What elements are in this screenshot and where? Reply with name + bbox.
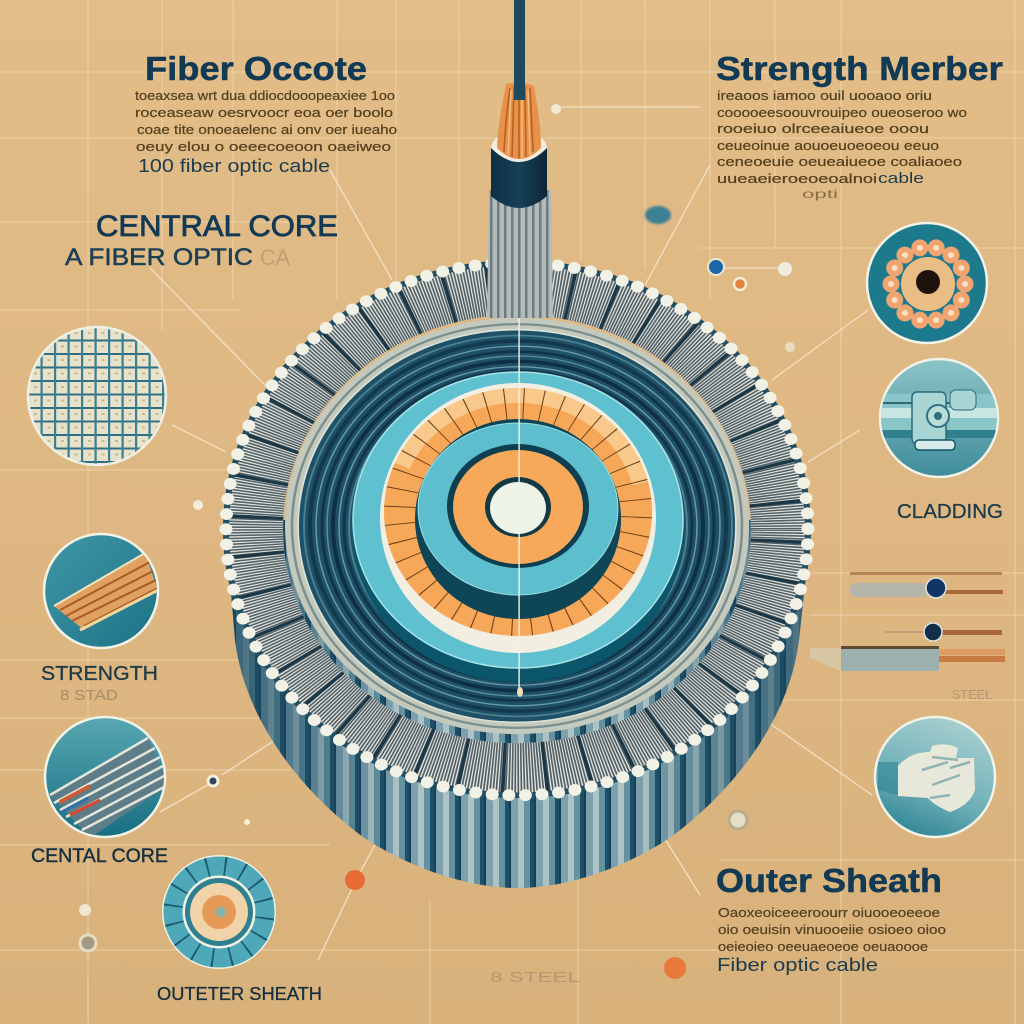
strength strands hatch ring: [226, 263, 808, 795]
body text: oio oeuisin vinuooeiie osioeo oioo: [718, 923, 946, 937]
heading: central core: CENTRAL CORE: [96, 210, 338, 243]
tagline: Fiber optic cable: [717, 955, 878, 975]
body text: toeaxsea wrt dua ddiocdooopeaxiee 1oo: [135, 89, 395, 103]
body text: coae tite onoeaelenc ai onv oer iueaho: [137, 123, 397, 137]
copper conductors: [939, 649, 1005, 655]
subheading: A FIBER OPTIC: [65, 244, 253, 271]
body text: roceaseaw oesrvoocr eoa oer boolo: [135, 106, 393, 120]
wire layer: [304, 336, 732, 716]
copper fibers: [497, 82, 541, 159]
body text: ireaoos iamoo ouil uooaoo oriu: [717, 89, 932, 103]
body text: cooooeesoouvrouipeo oueoseroo wo: [717, 106, 967, 120]
axis line: [518, 315, 520, 695]
medallion: connector: [880, 359, 1000, 477]
body text: oeieoieo oeeuaeoeoe oeuaoooe: [718, 940, 928, 954]
inner teal ring: [418, 423, 618, 595]
label: strength: STRENGTH: [41, 663, 158, 685]
side column shading: [225, 520, 812, 888]
strands cone: [487, 190, 553, 318]
orange ring shadow: [447, 444, 589, 568]
medallion: sheath fragment: [875, 717, 995, 837]
medallion: fiber bundle top right: [867, 223, 987, 343]
medallion: copper wires: [44, 534, 158, 648]
marker dots: [79, 104, 795, 979]
body text: ceneoeuie oeueaiueoe coaliaoeo: [717, 155, 962, 169]
opti word: opti: [802, 187, 838, 201]
axis bead: [517, 687, 523, 697]
label: cladding: CLADDING: [897, 501, 1003, 523]
side columns of the cable: [225, 520, 812, 888]
orange segment ring: [392, 395, 644, 629]
cream ring: [380, 383, 656, 653]
faded label: steel right: STEEL: [952, 687, 992, 702]
title: outer sheath: Outer Sheath: [716, 862, 942, 899]
blue connector: [924, 623, 942, 641]
silver cable: [850, 583, 928, 597]
body text: [717, 89, 967, 186]
thin fiber: [514, 0, 525, 100]
label: central core: CENTAL CORE: [31, 846, 168, 867]
cream collar edge: [491, 131, 547, 165]
body text: oeuy elou o oeeecoeoon oaeiweo: [136, 140, 391, 154]
inner dark well: [415, 419, 621, 619]
cable word: cable: [878, 170, 924, 187]
heading: central core: [65, 210, 338, 271]
blue connector: [926, 578, 946, 598]
main cable cross-section: [225, 263, 812, 888]
outer teal ring: [353, 372, 683, 668]
body tagline: 100 fiber optic cable: [138, 156, 330, 176]
core cladding: [485, 477, 551, 537]
small cable: middle wire: [885, 623, 1002, 641]
title: outer sheath: [716, 862, 946, 975]
faded label: steel: 8 STEEL: [490, 969, 580, 986]
body text: uueaeieroeoeoalnoi: [717, 172, 877, 186]
white fiber core: [490, 482, 546, 534]
label: outer sheath: OUTETER SHEATH: [157, 984, 322, 1004]
orange ring: [453, 450, 583, 564]
title: strength member: [716, 50, 1003, 201]
body text: [135, 89, 397, 154]
leader lines: [150, 107, 872, 960]
small cable: top wire: [850, 572, 1003, 598]
black collar: [491, 148, 547, 208]
outer teal ring depth: [352, 378, 684, 682]
faded label: stad: 8 STAD: [60, 687, 118, 704]
medallion: cable block section: [162, 855, 276, 969]
metal tape ring: [292, 324, 742, 728]
body text: ceueoinue aouoeuoeoeou eeuo: [717, 139, 939, 153]
medallion: fiber strands: [45, 717, 168, 838]
copper wire: [940, 630, 1002, 635]
title: strength member: Strength Merber: [716, 50, 1003, 87]
title: fiber occote: [135, 50, 397, 176]
copper wire: [940, 590, 1003, 594]
body text: rooeiuo olrceeaiueoe ooou: [717, 122, 929, 136]
cable end at top: [487, 0, 553, 318]
large cable end: [810, 646, 1005, 671]
body text: Oaoxeoiceeeroourr oiuooeoeeoe: [718, 906, 940, 920]
faded letters: CA: [260, 245, 290, 270]
title: fiber occote: Fiber Occote: [145, 50, 367, 87]
body text: [718, 906, 946, 954]
medallion: mesh: [28, 327, 166, 465]
